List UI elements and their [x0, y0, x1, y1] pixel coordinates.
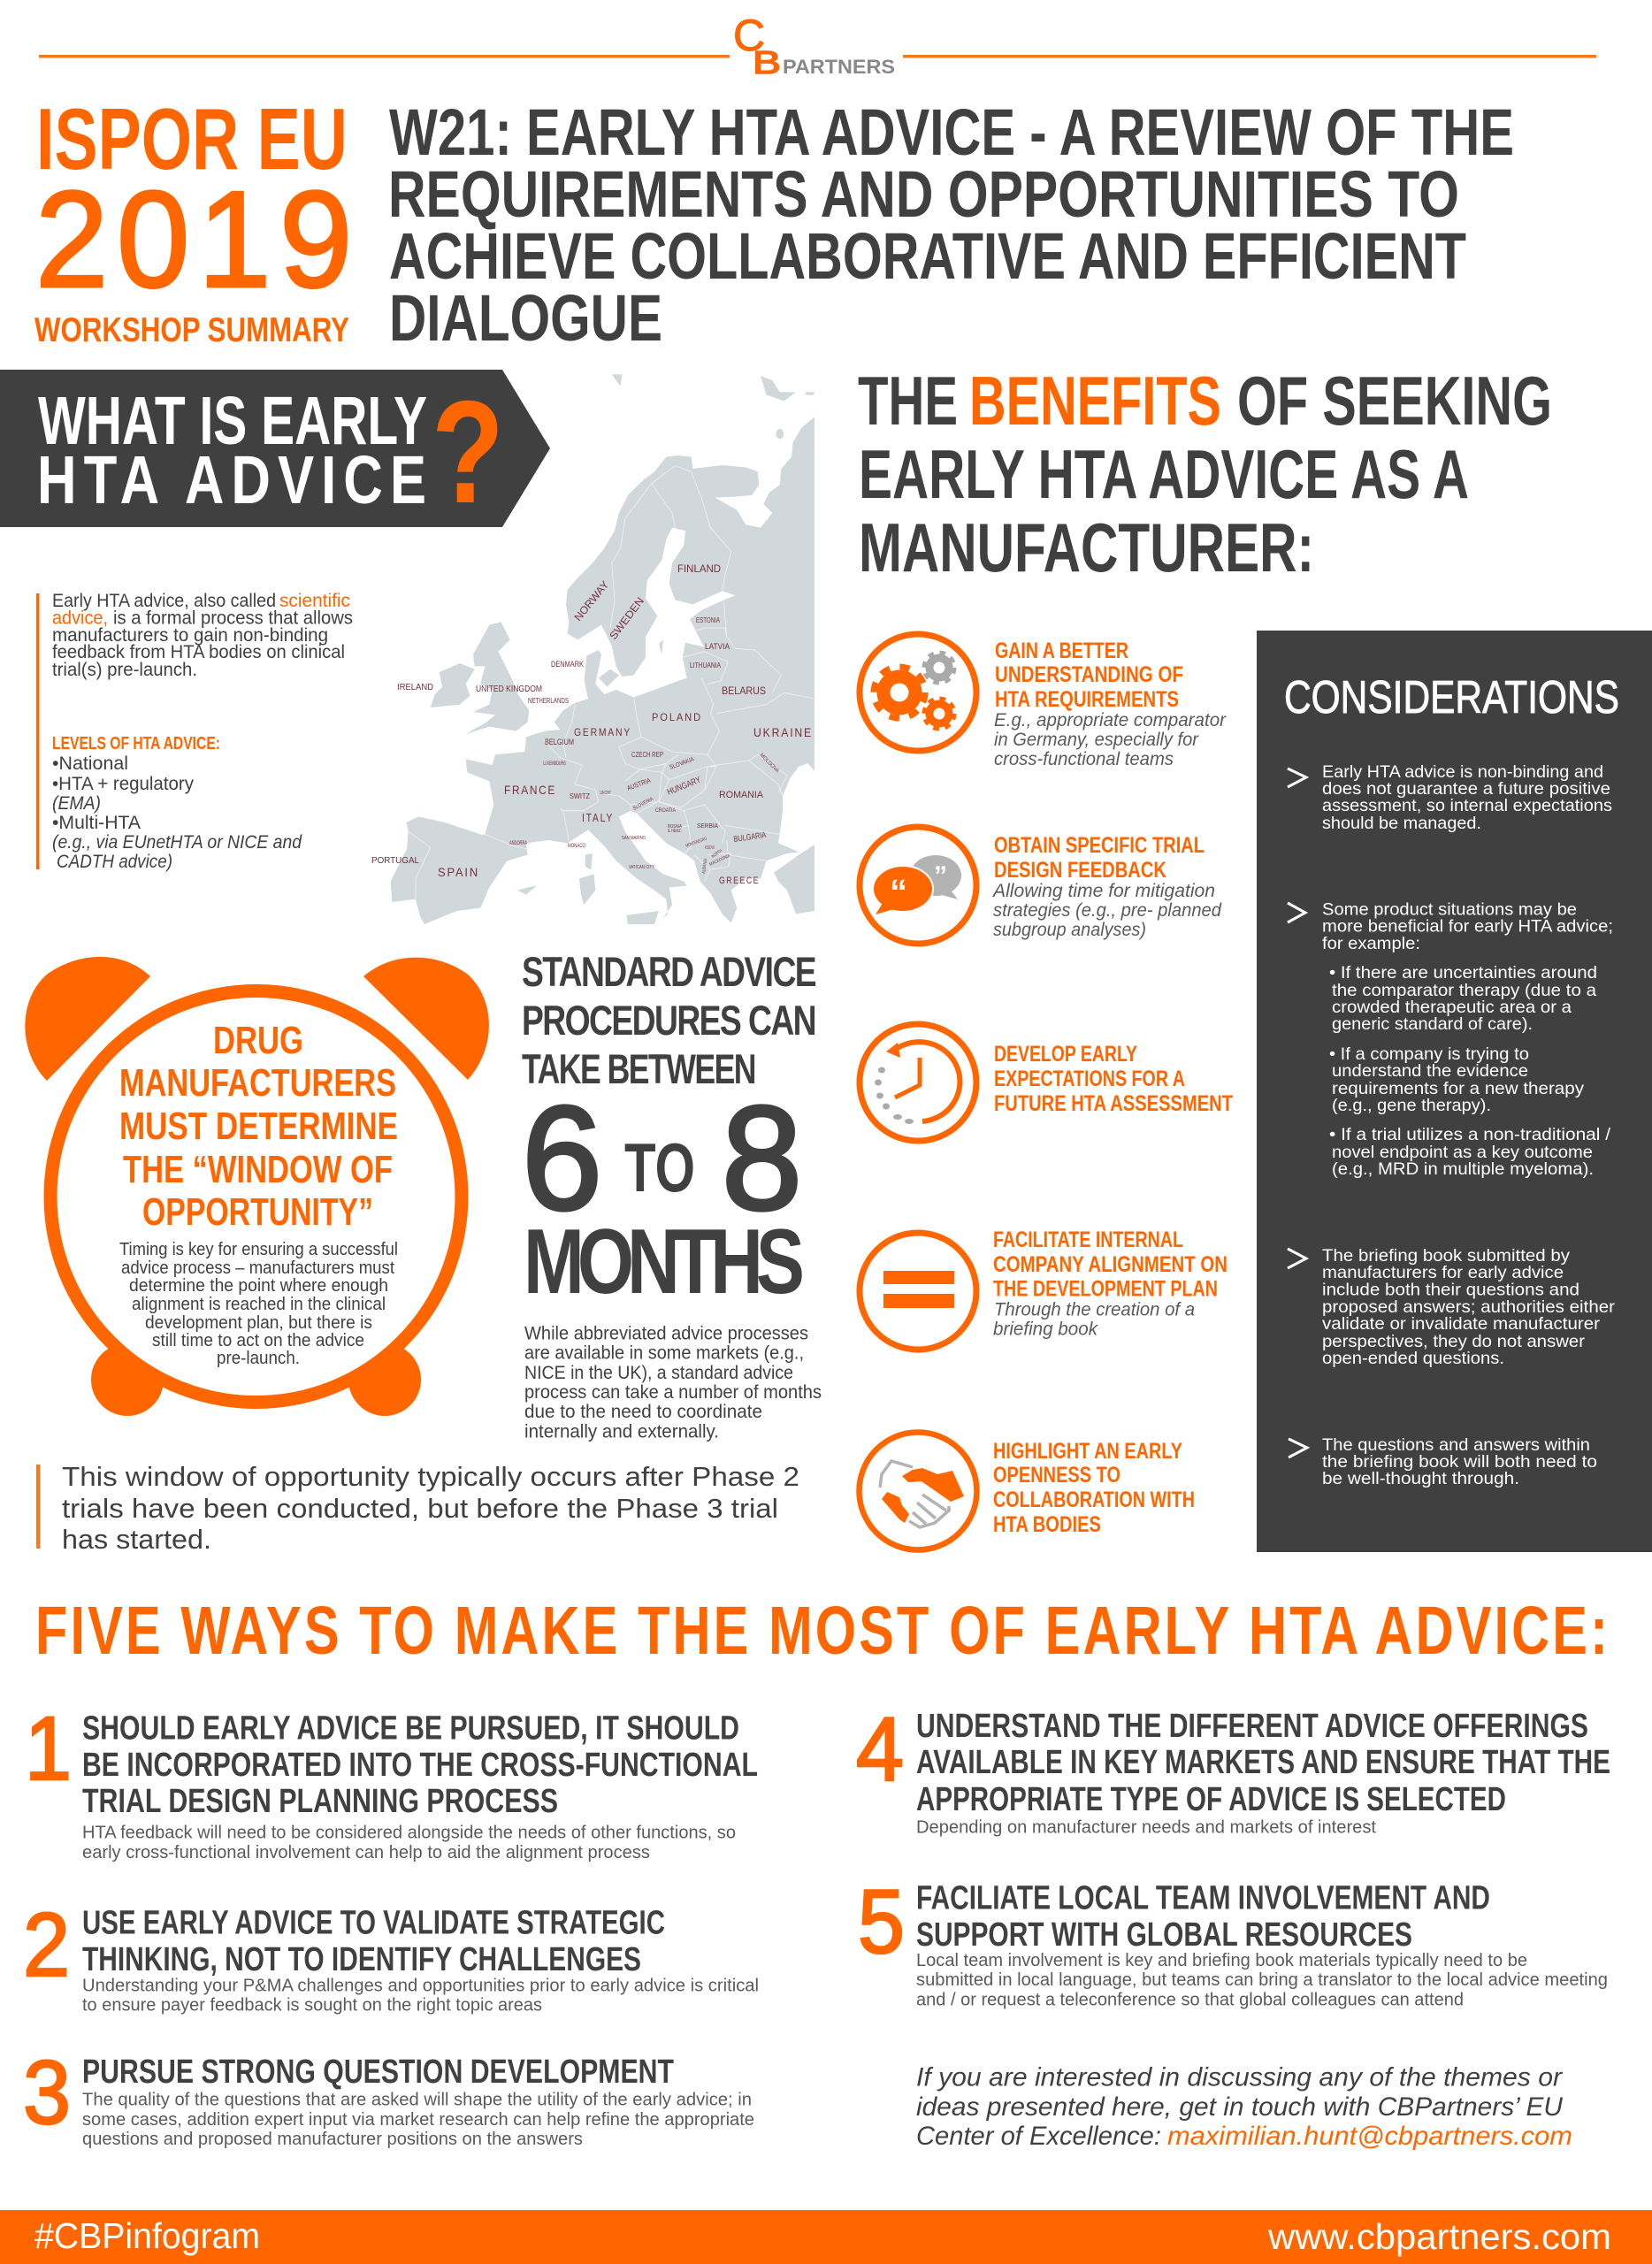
way 1: early cross-functional involvement can help to aid the alignment process: [82, 1842, 650, 1862]
map labels: LIECHT: [600, 791, 611, 796]
callout: window timing: This window of opportunity typically occurs after Phase 2: [62, 1461, 799, 1492]
way 3: PURSUE STRONG QUESTION DEVELOPMENT: [82, 2054, 674, 2091]
benefit 2: trial design feedback: strategies (e.g., pre- planned: [993, 900, 1222, 921]
consideration 4: be well-thought through.: [1322, 1469, 1519, 1488]
clock heading: DRUG: [213, 1019, 303, 1062]
stat: 6 to 8 months: TAKE BETWEEN: [522, 1045, 755, 1092]
header logo rule and CBPartners logo: PARTNERS: [783, 56, 895, 78]
banner: what is early HTA advice: WHAT IS EARLY: [38, 383, 427, 459]
way 1: HTA feedback will need to be considered alongside the needs of other functions, so: [82, 1822, 736, 1843]
way 5: submitted in local language, but teams can bring a translator to the local advice meeting: [916, 1970, 1608, 1990]
contact text: ideas presented here, get in touch with CBPartners’ EU: [916, 2092, 1563, 2122]
map labels: ITALY: [582, 812, 614, 824]
banner: what is early HTA advice: [0, 370, 550, 533]
clock heading: MUST DETERMINE: [119, 1105, 398, 1148]
consideration 2 with examples: [1288, 900, 1613, 1179]
clock heading: OPPORTUNITY”: [142, 1190, 373, 1234]
benefit 1: requirements: in Germany, especially for: [994, 730, 1199, 750]
way 3: [23, 2042, 754, 2149]
way 3: questions and proposed manufacturer positions on the answers: [82, 2129, 583, 2149]
footer bar: [0, 2210, 1652, 2264]
alarm clock: window of opportunity: [25, 957, 489, 1416]
stat: 6 to 8 months: PROCEDURES CAN: [522, 997, 815, 1044]
text block: definition of early HTA advice: feedback from HTA bodies on clinical: [52, 642, 345, 662]
consideration 2 with examples: understand the evidence: [1332, 1061, 1528, 1081]
map labels: BELARUS: [722, 685, 766, 697]
text block: abbreviated advice processes: due to the need to coordinate: [524, 1402, 762, 1422]
text block: definition of early HTA advice: [36, 591, 353, 872]
way 1: TRIAL DESIGN PLANNING PROCESS: [82, 1783, 558, 1820]
benefit 1: requirements: GAIN A BETTER: [995, 639, 1128, 663]
way 5: SUPPORT WITH GLOBAL RESOURCES: [916, 1916, 1412, 1954]
icon: clock with arrow: [860, 1024, 976, 1141]
benefit 1: requirements: E.g., appropriate comparator: [994, 710, 1227, 730]
callout: window timing: has started.: [62, 1524, 211, 1555]
benefit 3: expectations: DEVELOP EARLY: [994, 1042, 1137, 1067]
map labels: FINLAND: [677, 562, 721, 575]
map labels: NORWAY: [571, 578, 611, 623]
callout: window timing: trials have been conducted, but before the Phase 3 trial: [62, 1493, 778, 1524]
text block: abbreviated advice processes: NICE in the UK), a standard advice: [524, 1363, 793, 1383]
event title: ISPOR EU 2019: WORKSHOP SUMMARY: [34, 311, 349, 349]
text block: abbreviated advice processes: While abbreviated advice processes: [524, 1323, 808, 1344]
map labels: SLOVAKIA: [669, 756, 695, 771]
text block: abbreviated advice processes: are available in some markets (e.g.,: [524, 1342, 804, 1364]
benefit 5: collaboration: OPENNESS TO: [993, 1463, 1120, 1488]
map labels: POLAND: [652, 711, 702, 723]
benefits heading: [858, 362, 1552, 586]
text block: definition of early HTA advice: (e.g., via EUnetHTA or NICE and: [52, 832, 302, 853]
footer bar: #CBPinfogram: [34, 2215, 260, 2256]
panel: considerations: [1257, 631, 1652, 1552]
map labels: SPAIN: [438, 865, 479, 879]
map labels: LITHUANIA: [690, 662, 722, 669]
map labels: LUXEMBOURG: [543, 761, 566, 767]
icon: speech bubbles: ”: [934, 861, 947, 891]
icon: speech bubbles: [860, 827, 976, 944]
map labels: ESTONIA: [696, 616, 721, 624]
consideration 2 with examples: (e.g., gene therapy).: [1332, 1096, 1491, 1115]
map labels: UNITED KINGDOM: [476, 685, 542, 694]
map labels: AUSTRIA: [626, 776, 652, 792]
map labels: MONTENEGRO: [685, 837, 707, 849]
map labels: ANDORRA: [509, 841, 527, 846]
text block: abbreviated advice processes: internally and externally.: [524, 1422, 719, 1442]
consideration 2 with examples: Some product situations may be: [1322, 900, 1577, 920]
way 3: 3: [23, 2042, 71, 2143]
consideration 2 with examples: the comparator therapy (due to a: [1332, 981, 1596, 1000]
map labels: SERBIA: [697, 822, 718, 830]
banner: what is early HTA advice: HTA ADVICE: [37, 442, 433, 518]
map labels: KOSOVO: [705, 845, 715, 851]
way 1: 1: [25, 1698, 72, 1799]
map labels: PORTUGAL: [371, 855, 419, 866]
benefits heading: THE: [858, 362, 958, 440]
map labels: BOSNIA: [668, 824, 683, 830]
benefit 1: requirements: UNDERSTANDING OF: [995, 662, 1183, 687]
way 2: Understanding your P&MA challenges and opportunities prior to early advice is critical: [82, 1976, 759, 1995]
consideration 1: assessment, so internal expectations: [1322, 796, 1612, 815]
benefit 4: internal alignment: FACILITATE INTERNAL: [993, 1228, 1183, 1252]
benefit 2: trial design feedback: Allowing time for mitigation: [991, 881, 1215, 901]
map labels: NORTH: [711, 848, 723, 860]
clock body text: advice process – manufacturers must: [121, 1258, 394, 1278]
consideration 2 with examples: more beneficial for early HTA advice;: [1322, 916, 1613, 936]
map labels: VATICAN CITY: [629, 865, 655, 870]
event title: ISPOR EU 2019: 2019: [35, 163, 361, 316]
stat: 6 to 8 months: TO: [624, 1128, 695, 1206]
consideration 4: the briefing book will both need to: [1322, 1452, 1597, 1472]
consideration 3: include both their questions and: [1322, 1281, 1579, 1300]
text block: definition of early HTA advice: LEVELS OF HTA ADVICE:: [52, 734, 220, 753]
map labels: GERMANY: [574, 726, 631, 738]
benefit 1: requirements: HTA REQUIREMENTS: [995, 687, 1179, 712]
benefit 5: collaboration: HTA BODIES: [993, 1512, 1101, 1537]
consideration 2 with examples: • If there are uncertainties around: [1329, 963, 1597, 983]
map of Europe: [371, 374, 815, 924]
event title: ISPOR EU 2019: ISPOR EU: [36, 90, 348, 187]
way 1: [25, 1698, 758, 1862]
consideration 3: [1288, 1246, 1616, 1368]
clock body text: development plan, but there is: [145, 1313, 372, 1333]
map labels: DENMARK: [551, 660, 584, 669]
text block: definition of early HTA advice: •Multi-HTA: [52, 813, 141, 833]
map labels: HUNGARY: [666, 776, 702, 798]
consideration 2 with examples: crowded therapeutic area or a: [1332, 998, 1572, 1017]
text block: definition of early HTA advice: trial(s) pre-launch.: [52, 660, 197, 680]
footer bar: www.cbpartners.com: [1267, 2216, 1611, 2257]
consideration 1: should be managed.: [1322, 814, 1481, 833]
icon: handshake: [860, 1433, 976, 1549]
contact text: maximilian.hunt@cbpartners.com: [1167, 2122, 1572, 2151]
stat: 6 to 8 months: 6: [522, 1076, 602, 1241]
way 4: APPROPRIATE TYPE OF ADVICE IS SELECTED: [916, 1781, 1506, 1818]
consideration 3: proposed answers; authorities either: [1322, 1297, 1616, 1317]
clock body text: pre-launch.: [217, 1349, 300, 1368]
text block: definition of early HTA advice: Early HTA advice, also called: [52, 591, 276, 611]
consideration 2 with examples: for example:: [1322, 934, 1420, 953]
benefit 4: internal alignment: [860, 1228, 1228, 1350]
header logo rule and CBPartners logo: B: [753, 44, 781, 80]
map labels: BULGARIA: [733, 830, 768, 845]
clock heading: THE “WINDOW OF: [123, 1148, 393, 1191]
clock body text: still time to act on the advice: [152, 1331, 364, 1350]
stat: 6 to 8 months: STANDARD ADVICE: [522, 948, 816, 995]
way 3: The quality of the questions that are asked will shape the utility of the early advice; in: [82, 2089, 752, 2110]
header logo rule and CBPartners logo: C: [733, 11, 765, 60]
benefit 3: expectations: FUTURE HTA ASSESSMENT: [994, 1091, 1233, 1116]
map labels: FRANCE: [504, 783, 556, 797]
consideration 3: manufacturers for early advice: [1322, 1263, 1564, 1282]
consideration 3: open-ended questions.: [1322, 1349, 1504, 1368]
benefit 2: trial design feedback: DESIGN FEEDBACK: [994, 858, 1166, 883]
stat: 6 to 8 months: MONTHS: [524, 1211, 802, 1313]
workshop title: DIALOGUE: [389, 281, 662, 355]
map labels: SWITZ: [570, 792, 590, 800]
way 5: [858, 1871, 1608, 2009]
way 2: to ensure payer feedback is sought on the right topic areas: [82, 1995, 542, 2015]
text block: definition of early HTA advice: scientific: [279, 591, 350, 611]
benefit 5: collaboration: HIGHLIGHT AN EARLY: [993, 1439, 1182, 1464]
consideration 1: Early HTA advice is non-binding and: [1322, 762, 1603, 782]
map labels: LATVIA: [705, 642, 730, 651]
map labels: GREECE: [719, 876, 760, 886]
text block: abbreviated advice processes: [524, 1323, 822, 1442]
clock body text: [119, 1240, 398, 1368]
consideration 2 with examples: • If a trial utilizes a non-traditional /: [1329, 1125, 1611, 1144]
consideration 4: [1289, 1435, 1597, 1488]
benefit 4: internal alignment: briefing book: [993, 1319, 1098, 1339]
consideration 4: The questions and answers within: [1322, 1435, 1590, 1455]
benefit 4: internal alignment: Through the creation of a: [994, 1300, 1195, 1319]
way 2: THINKING, NOT TO IDENTIFY CHALLENGES: [82, 1941, 641, 1978]
contact text: If you are interested in discussing any of the themes or: [916, 2062, 1563, 2092]
benefit 2: trial design feedback: subgroup analyses): [993, 920, 1146, 940]
icon: gears: [860, 634, 976, 751]
way 1: BE INCORPORATED INTO THE CROSS-FUNCTIONAL: [82, 1747, 758, 1784]
text block: definition of early HTA advice: •National: [52, 753, 128, 774]
contact text: Center of Excellence:: [916, 2122, 1161, 2151]
text block: abbreviated advice processes: process can take a number of months: [524, 1382, 822, 1403]
map labels: ROMANIA: [719, 790, 764, 800]
text block: definition of early HTA advice: CADTH advice): [57, 852, 172, 872]
way 2: [23, 1894, 759, 2015]
map labels: UKRAINE: [753, 726, 813, 739]
consideration 2 with examples: (e.g., MRD in multiple myeloma).: [1332, 1159, 1594, 1179]
event title: ISPOR EU 2019: [34, 90, 361, 349]
way 4: Depending on manufacturer needs and markets of interest: [916, 1817, 1376, 1838]
map labels: SLOVENIA: [632, 797, 654, 812]
benefits heading: MANUFACTURER:: [859, 509, 1314, 586]
workshop title: [388, 96, 1514, 355]
way 2: USE EARLY ADVICE TO VALIDATE STRATEGIC: [82, 1905, 665, 1942]
way 4: 4: [856, 1699, 904, 1800]
callout: window timing: [36, 1461, 799, 1555]
map labels: MOLDOVA: [759, 753, 780, 774]
benefit 4: internal alignment: COMPANY ALIGNMENT ON: [993, 1252, 1228, 1277]
text block: definition of early HTA advice: advice,: [52, 608, 108, 628]
way 4: [856, 1699, 1610, 1838]
consideration 2 with examples: generic standard of care).: [1332, 1014, 1533, 1034]
text block: definition of early HTA advice: manufacturers to gain non-binding: [52, 625, 328, 646]
consideration 2 with examples: requirements for a new therapy: [1332, 1079, 1584, 1098]
clock body text: determine the point where enough: [129, 1276, 388, 1296]
benefit 2: trial design feedback: [860, 827, 1222, 944]
consideration 2 with examples: novel endpoint as a key outcome: [1332, 1143, 1593, 1162]
clock heading: MANUFACTURERS: [119, 1061, 396, 1105]
stat: 6 to 8 months: [522, 948, 816, 1313]
way 5: Local team involvement is key and briefing book materials typically need to be: [916, 1950, 1527, 1970]
consideration 3: perspectives, they do not answer: [1322, 1332, 1586, 1351]
benefit 5: collaboration: [860, 1433, 1195, 1549]
map labels: CZECH REP: [631, 751, 663, 759]
clock body text: alignment is reached in the clinical: [132, 1295, 386, 1314]
way 5: and / or request a teleconference so that global colleagues can attend: [916, 1990, 1464, 2009]
icon: equals sign: [860, 1233, 976, 1350]
way 5: 5: [858, 1871, 905, 1972]
benefit 4: internal alignment: THE DEVELOPMENT PLAN: [993, 1277, 1218, 1302]
way 3: some cases, addition expert input via market research can help refine the appropriate: [82, 2109, 754, 2130]
clock heading: [119, 1019, 398, 1234]
consideration 3: validate or invalidate manufacturer: [1322, 1314, 1601, 1334]
text block: definition of early HTA advice: •HTA + regulatory: [52, 774, 194, 794]
consideration 3: The briefing book submitted by: [1322, 1246, 1570, 1266]
benefit 3: expectations: [860, 1024, 1233, 1141]
benefit 1: requirements: cross-functional teams: [994, 749, 1174, 769]
benefit 3: expectations: EXPECTATIONS FOR A: [994, 1067, 1185, 1091]
way 2: 2: [23, 1894, 70, 1995]
map labels: ALBANIA: [701, 858, 708, 874]
map labels: SWEDEN: [607, 595, 646, 642]
map labels: BELGIUM: [545, 738, 574, 746]
benefits heading: OF SEEKING: [1237, 362, 1552, 440]
way 1: SHOULD EARLY ADVICE BE PURSUED, IT SHOULD: [82, 1710, 739, 1748]
header logo rule and CBPartners logo: [39, 11, 1596, 80]
way 5: FACILIATE LOCAL TEAM INVOLVEMENT AND: [916, 1880, 1490, 1917]
map labels: IRELAND: [397, 683, 433, 692]
text block: definition of early HTA advice: (EMA): [52, 793, 101, 814]
consideration 2 with examples: • If a company is trying to: [1329, 1044, 1529, 1064]
benefits heading: BENEFITS: [969, 362, 1221, 440]
stat: 6 to 8 months: 8: [722, 1076, 802, 1241]
clock body text: Timing is key for ensuring a successful: [119, 1240, 398, 1259]
map labels: & HERZ.: [668, 829, 682, 834]
map labels: [371, 562, 813, 886]
benefit 1: requirements: [860, 634, 1227, 769]
map labels: CROATIA: [655, 807, 677, 814]
map labels: SAN MARINO: [622, 836, 646, 841]
banner: what is early HTA advice: ?: [432, 371, 504, 533]
map labels: NETHERLANDS: [528, 697, 569, 705]
map labels: MACEDONIA: [708, 853, 731, 868]
benefit 2: trial design feedback: OBTAIN SPECIFIC TRIAL: [994, 833, 1205, 858]
benefit 5: collaboration: COLLABORATION WITH: [993, 1488, 1195, 1512]
icon: speech bubbles: “: [890, 873, 907, 912]
consideration 1: [1288, 762, 1612, 833]
contact text: [916, 2062, 1572, 2151]
consideration 1: does not guarantee a future positive: [1322, 779, 1610, 799]
text block: definition of early HTA advice: is a formal process that allows: [113, 608, 353, 628]
map labels: MONACO: [568, 844, 585, 849]
